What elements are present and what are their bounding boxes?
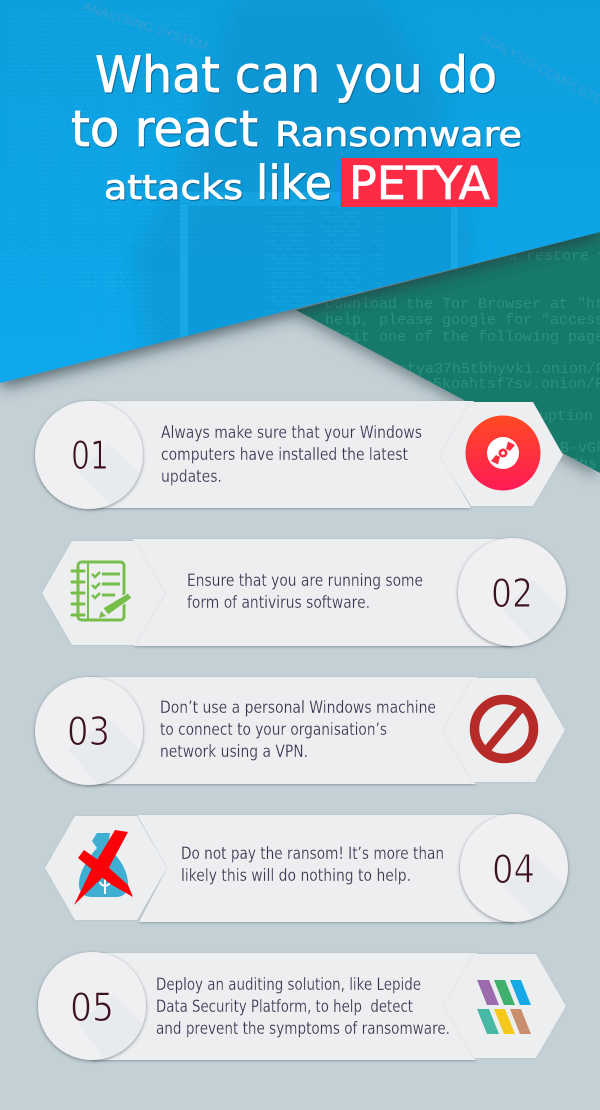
step number 05: 05 — [70, 986, 114, 1031]
step 03 text: to connect to your organisation’s — [160, 720, 387, 739]
panel: step 05 — [38, 952, 566, 1072]
step 03 text — [160, 698, 436, 761]
step 05 text — [156, 975, 450, 1038]
icon: crossed out money bag — [74, 830, 133, 905]
step 05 text: Data Security Platform, to help detect — [156, 997, 413, 1016]
step number 01: 01 — [71, 434, 109, 479]
step 02 text: form of antivirus software. — [187, 593, 370, 612]
panel: green ransom note screen: Bbs — [570, 456, 597, 473]
panel: green ransom note screen: petya37h5tbhyvki.onion/R — [389, 361, 600, 378]
icon: red disc — [466, 416, 540, 490]
step 04 text — [181, 844, 444, 885]
title — [71, 46, 522, 210]
title: What can you do — [95, 46, 497, 104]
panel: green ransom note screen: visit one of the following page — [325, 329, 600, 346]
panel: step 01 — [35, 401, 563, 515]
title: attacks — [104, 168, 243, 208]
title: Ransomware — [275, 115, 522, 155]
step 01 text — [161, 423, 422, 486]
panel: step 04 — [45, 814, 577, 929]
panel: blue header background — [0, 0, 600, 383]
step 02 text — [187, 571, 423, 612]
highlighted word PETYA: PETYA — [349, 157, 490, 210]
icon: prohibition sign — [474, 700, 534, 758]
title: like — [256, 156, 332, 210]
step 01 text: updates. — [161, 467, 222, 486]
step number 04: 04 — [492, 848, 535, 893]
step number 03: 03 — [67, 710, 110, 755]
step 04 text: Do not pay the ransom! It’s more than — [181, 844, 444, 863]
icon: Lepide logo bars — [477, 980, 531, 1034]
step 04 text: likely this will do nothing to help. — [181, 866, 411, 885]
step 05 text: and prevent the symptoms of ransomware. — [156, 1019, 450, 1038]
step number 02: 02 — [491, 572, 533, 617]
panel: green ransom note screen: petya5koahtsf7sv.onion/R — [388, 376, 600, 393]
panel: step 03 — [35, 677, 565, 795]
panel: green ransom note screen: corruption — [503, 408, 593, 425]
panel: blue header background: ANALYSING SYSTEM... — [81, 0, 220, 57]
panel: green ransom note screen: Download the Tor Browser at "ht — [325, 296, 600, 313]
icon: green checklist and pencil — [72, 561, 132, 621]
step 03 text: Don’t use a personal Windows machine — [160, 698, 436, 717]
step 05 text: Deploy an auditing solution, like Lepide — [156, 975, 421, 994]
panel: green ransom note screen — [296, 232, 600, 473]
step 02 text: Ensure that you are running some — [187, 571, 423, 590]
panel: step 02 — [42, 538, 574, 652]
step 01 text: Always make sure that your Windows — [161, 423, 422, 442]
step 03 text: network using a VPN. — [160, 742, 308, 761]
step 01 text: computers have installed the latest — [161, 445, 408, 464]
panel: green ransom note screen: help, please google for "access — [325, 312, 600, 329]
title: to react — [71, 100, 258, 158]
